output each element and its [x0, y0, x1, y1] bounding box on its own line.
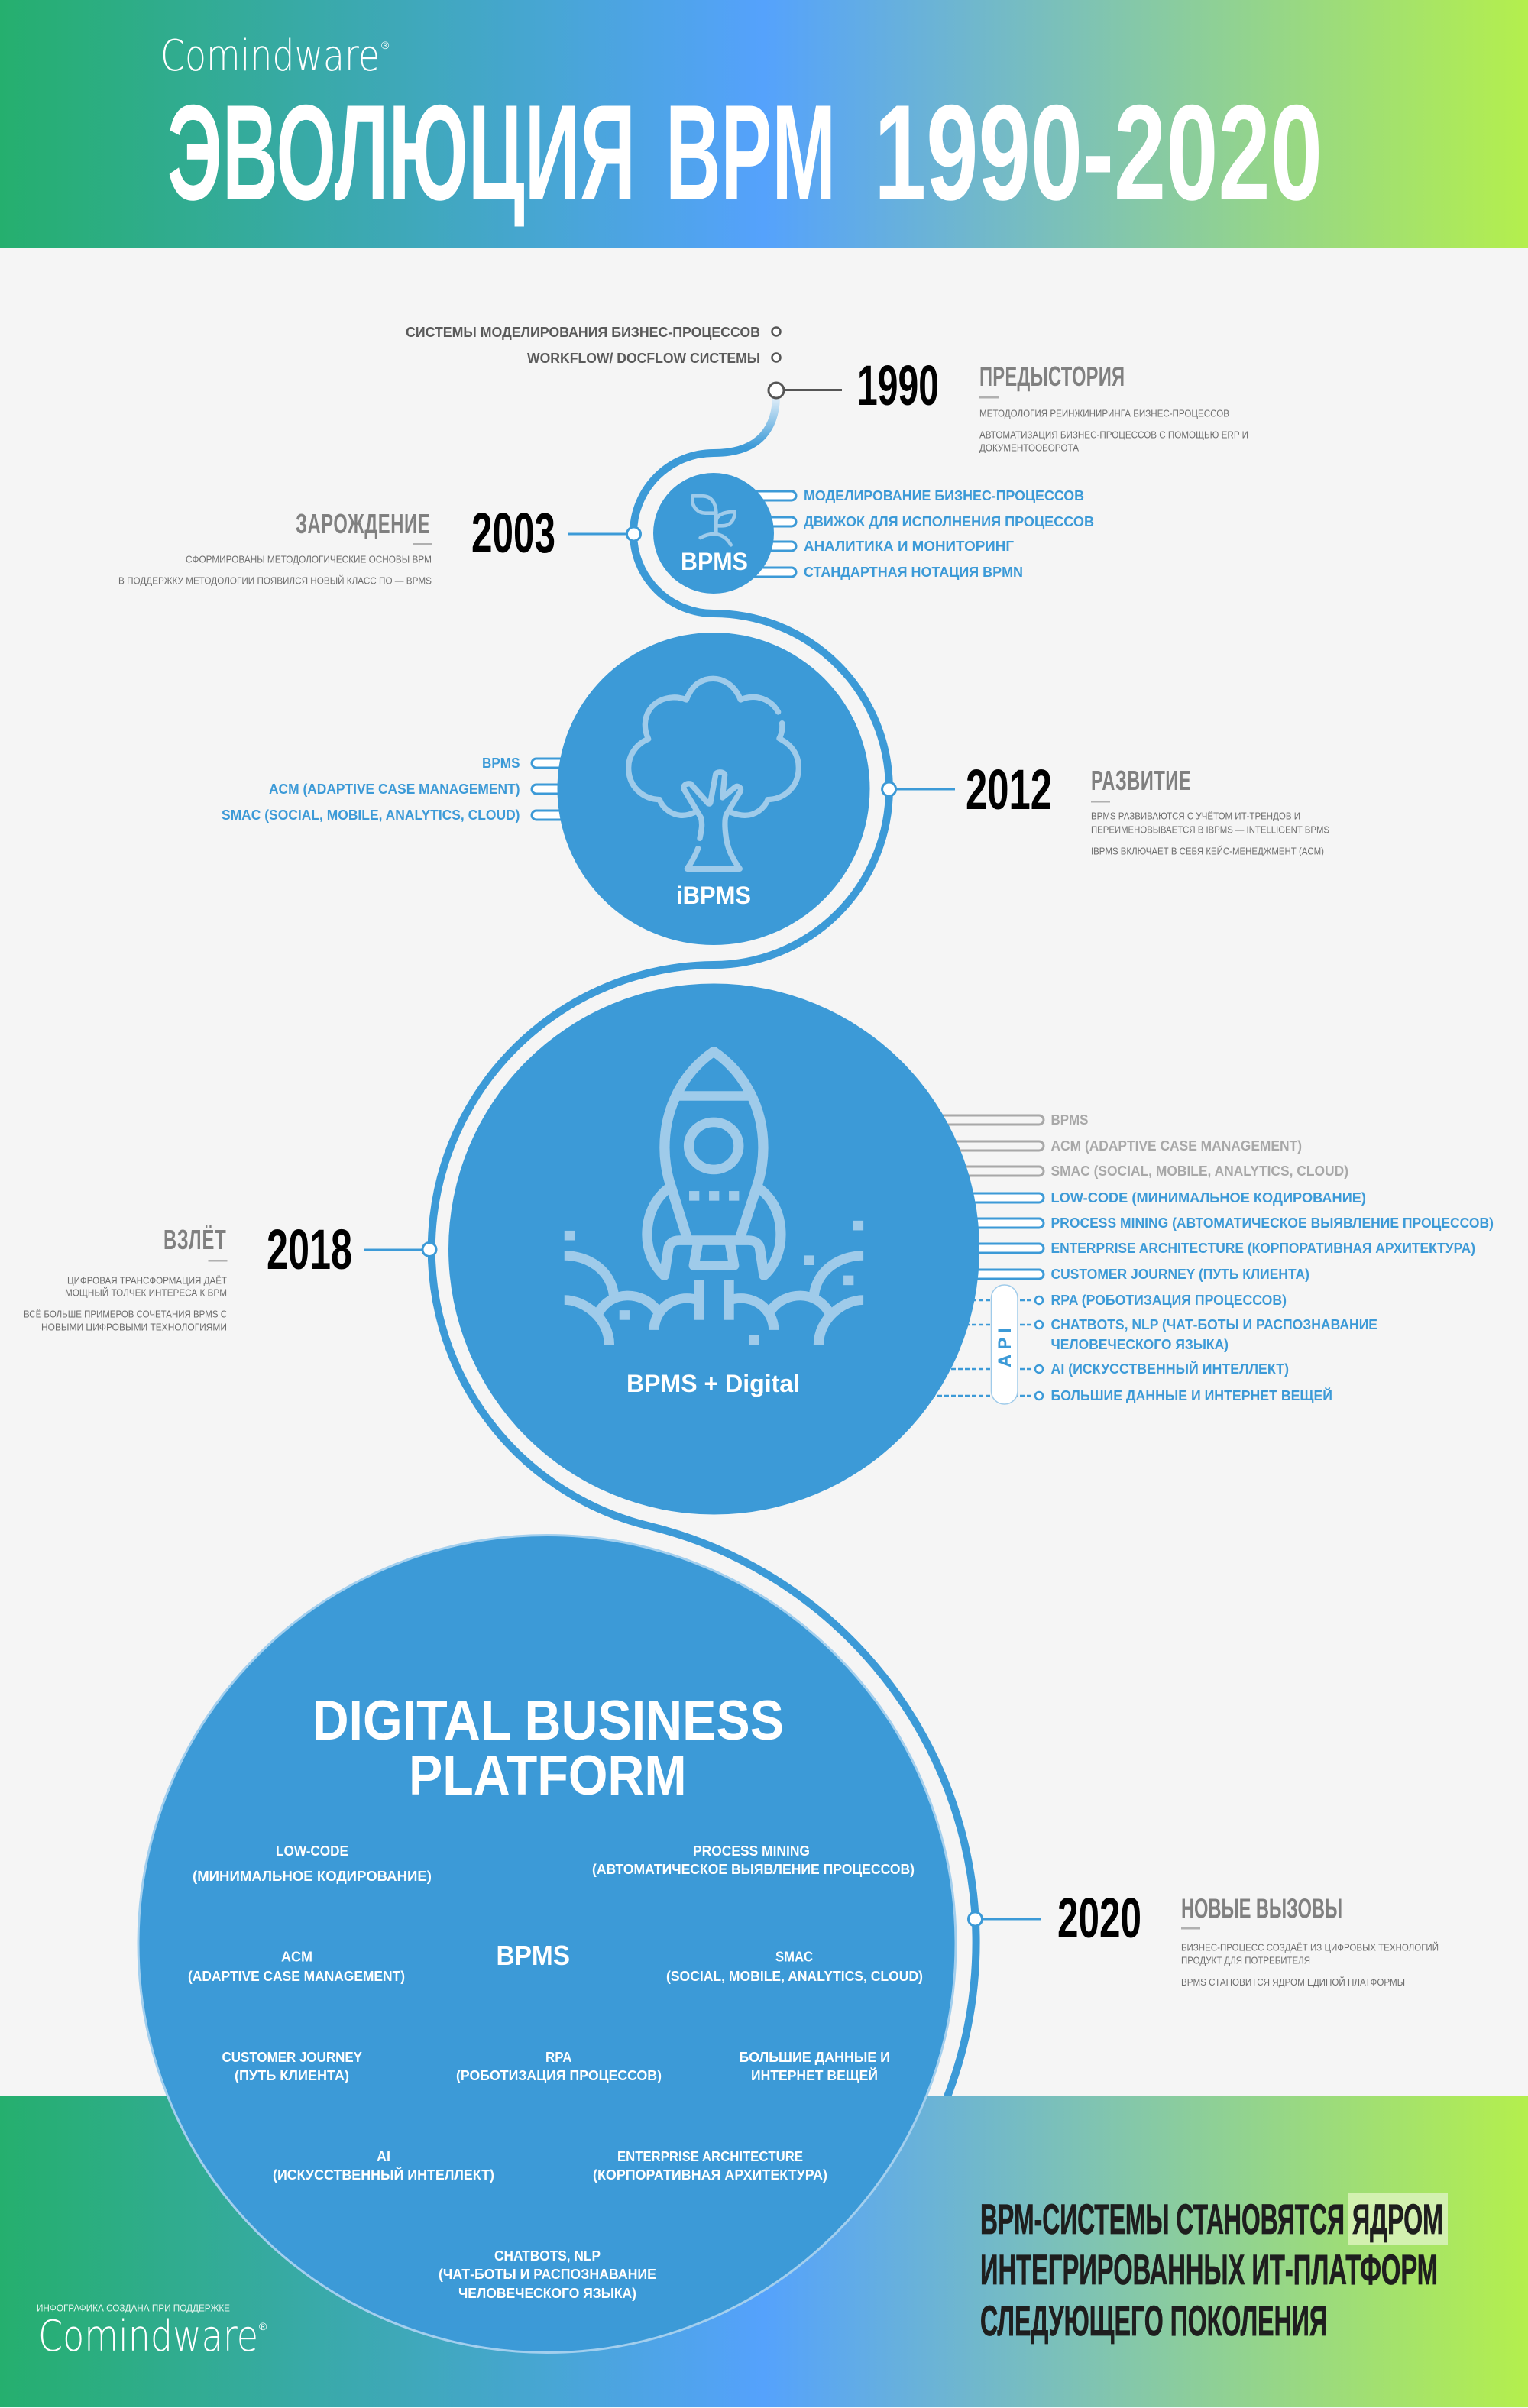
header banner: [0, 0, 1528, 248]
credit: supported by Comindware: Comindware: [38, 2312, 258, 2361]
BPMS feature list: МОДЕЛИРОВАНИЕ БИЗНЕС-ПРОЦЕССОВ: [804, 488, 1084, 503]
iBPMS feature list: SMAC (SOCIAL, MOBILE, ANALYTICS, CLOUD): [222, 808, 520, 823]
text block: НОВЫЕ ВЫЗОВЫ: БИЗНЕС-ПРОЦЕСС СОЗДАЁТ ИЗ ЦИФРОВЫХ ТЕХНОЛОГИЙ: [1181, 1942, 1439, 1953]
text block: ВЗЛЁТ: МОЩНЫЙ ТОЛЧЕК ИНТЕРЕСА К BPM: [65, 1287, 227, 1299]
milestone 2012: 2012: [966, 758, 1052, 821]
text block: РАЗВИТИЕ: РАЗВИТИЕ: [1091, 765, 1191, 796]
API pill: API: [995, 1323, 1015, 1367]
icon: rocket: [565, 1051, 863, 1345]
API pill: [992, 1285, 1018, 1404]
text block: ЗАРОЖДЕНИЕ: СФОРМИРОВАНЫ МЕТОДОЛОГИЧЕСКИЕ ОСНОВЫ BPM: [186, 553, 432, 565]
text block: ВЗЛЁТ: ЦИФРОВАЯ ТРАНСФОРМАЦИЯ ДАЁТ: [67, 1274, 227, 1287]
text block: ПРЕДЫСТОРИЯ: АВТОМАТИЗАЦИЯ БИЗНЕС-ПРОЦЕССОВ С ПОМОЩЬЮ ERP И: [979, 429, 1248, 440]
logo: Comindware: Comindware: [160, 31, 380, 81]
milestone 2003: 2003: [471, 501, 555, 565]
item: BPMS core: BPMS: [497, 1940, 570, 1971]
text block: ЗАРОЖДЕНИЕ: [118, 509, 432, 587]
text block: НОВЫЕ ВЫЗОВЫ: [1181, 1894, 1439, 1988]
text block: ВЗЛЁТ: ВСЁ БОЛЬШЕ ПРИМЕРОВ СОЧЕТАНИЯ BPMS С: [24, 1308, 227, 1320]
item: Low-code: LOW-CODE: [276, 1843, 348, 1859]
BPMS feature list: ДВИЖОК ДЛЯ ИСПОЛНЕНИЯ ПРОЦЕССОВ: [804, 514, 1094, 529]
text block: ЗАРОЖДЕНИЕ: В ПОДДЕРЖКУ МЕТОДОЛОГИИ ПОЯВИЛСЯ НОВЫЙ КЛАСС ПО — BPMS: [118, 574, 432, 587]
item: Process mining: (АВТОМАТИЧЕСКОЕ ВЫЯВЛЕНИЕ ПРОЦЕССОВ): [592, 1862, 915, 1877]
item: ACM: [188, 1950, 405, 1984]
text block: ПРЕДЫСТОРИЯ: ДОКУМЕНТООБОРОТА: [979, 442, 1079, 454]
title: ЭВОЛЮЦИЯ: [167, 76, 636, 228]
text block: РАЗВИТИЕ: [1091, 765, 1329, 857]
circle: BPMS: BPMS: [681, 548, 748, 575]
text block: ПРЕДЫСТОРИЯ: ПРЕДЫСТОРИЯ: [979, 361, 1125, 392]
text block: НОВЫЕ ВЫЗОВЫ: НОВЫЕ ВЫЗОВЫ: [1181, 1894, 1342, 1924]
text block: РАЗВИТИЕ: IBPMS ВКЛЮЧАЕТ В СЕБЯ КЕЙС-МЕНЕДЖМЕНТ (ACM): [1091, 845, 1324, 857]
text block: РАЗВИТИЕ: ПЕРЕИМЕНОВЫВАЕТСЯ В IBPMS — INTELLIGENT BPMS: [1091, 824, 1329, 836]
text block: ВЗЛЁТ: [24, 1225, 228, 1332]
text block: НОВЫЕ ВЫЗОВЫ: BPMS СТАНОВИТСЯ ЯДРОМ ЕДИНОЙ ПЛАТФОРМЫ: [1181, 1976, 1405, 1988]
text block: ПРЕДЫСТОРИЯ: [979, 361, 1248, 454]
milestone 2020: 2020: [1057, 1886, 1141, 1950]
item: RPA: (РОБОТИЗАЦИЯ ПРОЦЕССОВ): [456, 2068, 662, 2083]
milestone 1990: [769, 354, 1248, 454]
text block: НОВЫЕ ВЫЗОВЫ: ПРОДУКТ ДЛЯ ПОТРЕБИТЕЛЯ: [1181, 1954, 1310, 1966]
item: Chatbots: ЧЕЛОВЕЧЕСКОГО ЯЗЫКА): [458, 2286, 636, 2301]
title: 1990-2020: [874, 76, 1322, 228]
prehistory list: СИСТЕМЫ МОДЕЛИРОВАНИЯ БИЗНЕС-ПРОЦЕССОВ: [406, 325, 760, 340]
iBPMS feature list: ACM (ADAPTIVE CASE MANAGEMENT): [269, 782, 520, 797]
milestone 2020: [969, 1886, 1439, 1988]
item: SMAC: [666, 1950, 923, 1984]
text block: ЗАРОЖДЕНИЕ: ЗАРОЖДЕНИЕ: [296, 509, 430, 539]
item: Enterprise architecture: (КОРПОРАТИВНАЯ АРХИТЕКТУРА): [593, 2167, 827, 2183]
item: SMAC: SMAC: [775, 1950, 813, 1965]
item: Chatbots: CHATBOTS, NLP: [494, 2248, 601, 2264]
prehistory list: [406, 325, 781, 366]
text block: ПРЕДЫСТОРИЯ: МЕТОДОЛОГИЯ РЕИНЖИНИРИНГА БИЗНЕС-ПРОЦЕССОВ: [979, 408, 1229, 419]
circle: iBPMS: [558, 633, 869, 945]
heading: Digital Business Platform: DIGITAL BUSINESS: [312, 1690, 784, 1752]
circle: Digital Business Platform: [138, 1536, 956, 2353]
item: Low-code: (МИНИМАЛЬНОЕ КОДИРОВАНИЕ): [193, 1869, 432, 1884]
circle: BPMS + Digital: BPMS + Digital: [626, 1370, 800, 1397]
logo: Comindware: ®: [381, 39, 390, 51]
item: Chatbots: (ЧАТ-БОТЫ И РАСПОЗНАВАНИЕ: [439, 2267, 656, 2282]
item: Enterprise architecture: ENTERPRISE ARCHITECTURE: [617, 2149, 803, 2164]
item: Customer journey: [222, 2050, 362, 2083]
title: BPM: [665, 76, 836, 228]
item: Chatbots: [439, 2248, 656, 2301]
circle: BPMS + Digital: [448, 984, 979, 1514]
BPMS + Digital feature list: AI (ИСКУССТВЕННЫЙ ИНТЕЛЛЕКТ): [1051, 1361, 1289, 1377]
item: RPA: [456, 2050, 662, 2083]
text block: РАЗВИТИЕ: BPMS РАЗВИВАЮТСЯ С УЧЁТОМ ИТ-ТРЕНДОВ И: [1091, 810, 1300, 822]
BPMS feature list: АНАЛИТИКА И МОНИТОРИНГ: [804, 539, 1014, 554]
prehistory list: WORKFLOW/ DOCFLOW СИСТЕМЫ: [527, 351, 760, 366]
circle: BPMS: [653, 473, 774, 594]
item: ACM: (ADAPTIVE CASE MANAGEMENT): [188, 1969, 405, 1984]
item: AI: [273, 2149, 494, 2183]
BPMS + Digital feature list: PROCESS MINING (АВТОМАТИЧЕСКОЕ ВЫЯВЛЕНИЕ ПРОЦЕССОВ): [1051, 1215, 1494, 1231]
item: Process mining: PROCESS MINING: [693, 1843, 810, 1859]
BPMS + Digital feature list: RPA (РОБОТИЗАЦИЯ ПРОЦЕССОВ): [1051, 1293, 1287, 1308]
circle: iBPMS: iBPMS: [676, 882, 751, 909]
item: AI: (ИСКУССТВЕННЫЙ ИНТЕЛЛЕКТ): [273, 2167, 494, 2183]
BPMS + Digital feature list: LOW-CODE (МИНИМАЛЬНОЕ КОДИРОВАНИЕ): [1051, 1190, 1366, 1206]
iBPMS feature list: BPMS: [482, 756, 520, 771]
BPMS + Digital feature list: CHATBOTS, NLP (ЧАТ-БОТЫ И РАСПОЗНАВАНИЕ: [1051, 1317, 1377, 1332]
item: Low-code: [193, 1843, 432, 1884]
BPMS + Digital feature list: BPMS: [1051, 1112, 1088, 1128]
BPMS + Digital feature list: ENTERPRISE ARCHITECTURE (КОРПОРАТИВНАЯ АРХИТЕКТУРА): [1051, 1241, 1475, 1256]
conclusion text: ЯДРОМ: [1352, 2195, 1443, 2243]
item: Customer journey: (ПУТЬ КЛИЕНТА): [235, 2068, 349, 2083]
BPMS feature list: СТАНДАРТНАЯ НОТАЦИЯ BPMN: [804, 565, 1023, 580]
item: SMAC: (SOCIAL, MOBILE, ANALYTICS, CLOUD): [666, 1969, 923, 1984]
milestone 2003: [118, 501, 640, 587]
timeline curve: [432, 399, 976, 2109]
highlight: ядром: [1348, 2193, 1448, 2245]
item: RPA: RPA: [545, 2050, 571, 2065]
text block: ВЗЛЁТ: ВЗЛЁТ: [163, 1225, 226, 1255]
BPMS + Digital feature list: [879, 1112, 1494, 1403]
BPMS + Digital feature list: БОЛЬШИЕ ДАННЫЕ И ИНТЕРНЕТ ВЕЩЕЙ: [1051, 1387, 1332, 1403]
item: Big data: [740, 2050, 890, 2083]
heading: Digital Business Platform: [312, 1690, 784, 1807]
icon: tree: [629, 678, 798, 869]
item: ACM: ACM: [281, 1950, 312, 1965]
heading: Digital Business Platform: PLATFORM: [409, 1745, 687, 1807]
milestone 1990: 1990: [857, 354, 939, 417]
item: Customer journey: CUSTOMER JOURNEY: [222, 2050, 362, 2065]
item: AI: AI: [377, 2149, 390, 2164]
BPMS + Digital feature list: ACM (ADAPTIVE CASE MANAGEMENT): [1051, 1138, 1302, 1154]
milestone 2018: 2018: [267, 1218, 352, 1281]
milestone 2012: [882, 758, 1329, 857]
item: Big data: ИНТЕРНЕТ ВЕЩЕЙ: [751, 2067, 878, 2083]
footer banner: [0, 2096, 1528, 2407]
text block: ВЗЛЁТ: НОВЫМИ ЦИФРОВЫМИ ТЕХНОЛОГИЯМИ: [41, 1322, 227, 1332]
iBPMS feature list: [222, 756, 616, 823]
icon: sprout: [692, 496, 735, 545]
credit: supported by Comindware: ИНФОГРАФИКА СОЗДАНА ПРИ ПОДДЕРЖКЕ: [37, 2303, 230, 2313]
item: Enterprise architecture: [593, 2149, 827, 2183]
item: Big data: БОЛЬШИЕ ДАННЫЕ И: [740, 2050, 890, 2065]
conclusion text: [980, 2193, 1448, 2345]
credit: supported by Comindware: ®: [259, 2320, 267, 2332]
BPMS + Digital feature list: SMAC (SOCIAL, MOBILE, ANALYTICS, CLOUD): [1051, 1164, 1348, 1179]
milestone 2018: [24, 1218, 436, 1332]
BPMS + Digital feature list: ЧЕЛОВЕЧЕСКОГО ЯЗЫКА): [1051, 1337, 1229, 1352]
item: Process mining: [592, 1843, 915, 1877]
BPMS + Digital feature list: CUSTOMER JOURNEY (ПУТЬ КЛИЕНТА): [1051, 1267, 1309, 1282]
BPMS feature list: [726, 488, 1094, 580]
